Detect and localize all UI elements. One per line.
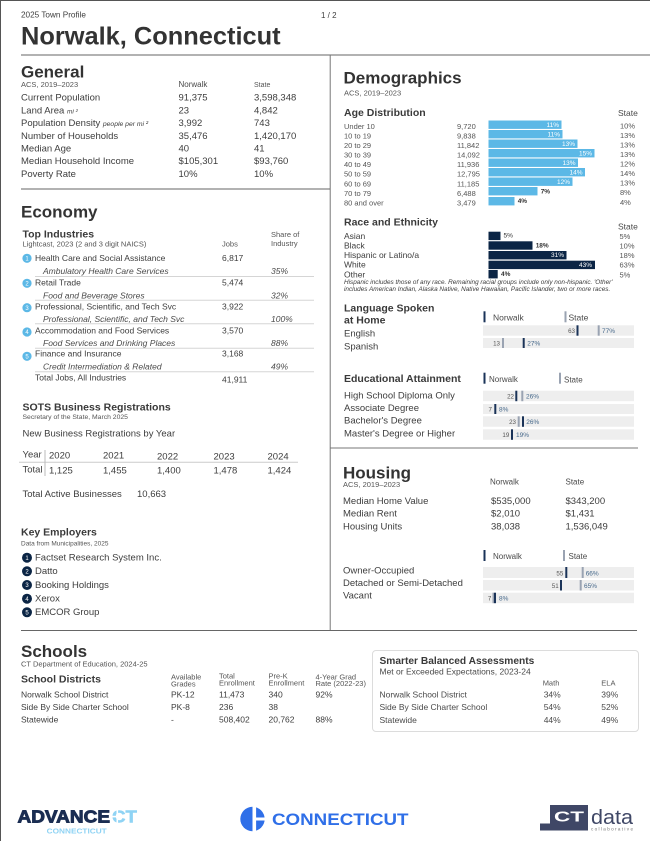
- education chart: 8%: [499, 406, 509, 414]
- page number: 1 / 2: [321, 11, 337, 20]
- education chart: 19%: [516, 432, 529, 439]
- housing column headers: [490, 478, 585, 487]
- housing table: Median Home Value: [343, 496, 428, 507]
- race state header: State: [618, 221, 638, 231]
- key employers list: EMCOR Group: [35, 607, 99, 618]
- top industries table: 100%: [271, 314, 293, 324]
- industries column headers: Share of: [271, 230, 300, 239]
- panel: general: [21, 63, 296, 180]
- registrations table: 1,400: [157, 466, 181, 477]
- logo: AdvanceCT: CT: [112, 807, 137, 827]
- school districts table: Statewide: [21, 715, 59, 725]
- language chart: 63: [568, 328, 576, 335]
- school districts heading: School Districts: [21, 673, 101, 685]
- education chart: 7: [489, 406, 493, 414]
- logo: Connecticut: CONNECTICUT: [272, 810, 409, 829]
- race and ethnicity chart: 18%: [536, 242, 549, 249]
- panel: schools: [21, 642, 366, 725]
- educational attainment heading: Educational Attainment: [344, 373, 461, 385]
- school table headers: Grades: [171, 679, 196, 688]
- age distribution chart: 11,842: [457, 141, 479, 150]
- language chart: [344, 325, 634, 352]
- language chart: 13: [493, 340, 501, 348]
- general statistics table: 10%: [254, 169, 274, 180]
- age distribution chart: 13%: [620, 150, 635, 159]
- assessments table: 54%: [544, 702, 561, 712]
- heading: housing: Housing: [343, 463, 411, 482]
- top industries table: 3,922: [222, 302, 244, 312]
- housing table: Housing Units: [343, 521, 402, 532]
- school districts table: PK-12: [171, 689, 195, 699]
- school table headers: Pre-K: [268, 672, 288, 680]
- panel: economy: [19, 203, 314, 618]
- logo: AdvanceCT: [18, 807, 137, 835]
- top industries table: 5,474: [222, 278, 244, 288]
- top industries table: 49%: [271, 361, 288, 371]
- school districts table: [21, 689, 333, 725]
- general statistics table: 23: [178, 105, 189, 116]
- school districts table: 38: [268, 702, 278, 712]
- panel: demographics: [344, 68, 638, 440]
- housing table: $2,010: [491, 509, 520, 520]
- age distribution chart: 14%: [620, 169, 635, 178]
- school table headers: 4-Year Grad: [316, 672, 356, 682]
- column headers: State: [254, 82, 270, 89]
- logo: CT Data Collaborative: [540, 805, 634, 832]
- age distribution chart: 15%: [579, 150, 592, 158]
- housing chart: Detached or Semi-Detached: [343, 578, 463, 589]
- top industries table: Credit Intermediation & Related: [43, 361, 162, 371]
- education chart: 23: [509, 419, 517, 426]
- race and ethnicity chart: Black: [344, 240, 366, 250]
- age distribution chart: 4%: [620, 198, 631, 207]
- key employers list: [22, 552, 162, 618]
- registrations table: 2021: [103, 450, 124, 462]
- age distribution chart: 12%: [620, 160, 635, 169]
- registrations table: 1,125: [49, 466, 73, 477]
- age distribution chart: 11,936: [457, 160, 479, 169]
- top industries table: 5: [25, 354, 29, 360]
- housing table: 1,536,049: [566, 521, 608, 532]
- total active businesses: Total Active Businesses: [22, 489, 122, 500]
- industries column headers: [222, 230, 300, 249]
- housing table: Median Rent: [343, 509, 397, 520]
- race footnote: includes American Indian, Alaska Native, Native Hawaiian, Pacific Islander, two or more races.: [344, 286, 610, 293]
- general statistics table: Number of Households: [21, 131, 118, 142]
- age distribution chart: 3,479: [457, 199, 476, 208]
- race and ethnicity chart: White: [344, 260, 366, 270]
- registrations subtitle: New Business Registrations by Year: [22, 428, 175, 439]
- education legend: [484, 373, 583, 384]
- source note: ACS, 2019–2023: [21, 80, 78, 89]
- top industries table: Professional, Scientific, and Tech Svc: [43, 314, 185, 324]
- race footnote: [344, 279, 613, 293]
- general statistics table: Current Population: [21, 93, 100, 104]
- top industries table: 6,817: [222, 253, 244, 263]
- key employers list: Datto: [35, 566, 58, 577]
- general statistics table: Population Density people per mi ²: [21, 118, 149, 129]
- age distribution chart: 13%: [620, 131, 635, 140]
- top industries table: Ambulatory Health Care Services: [42, 266, 169, 276]
- assessments table: 39%: [601, 689, 619, 699]
- education chart: 22: [507, 394, 515, 400]
- schools source: CT Department of Education, 2024-25: [21, 659, 148, 668]
- key employers list: 5: [25, 610, 29, 616]
- registrations table: 2022: [157, 452, 178, 462]
- panel: smarter balanced assessments: [372, 650, 638, 732]
- general statistics table: Poverty Rate: [21, 169, 76, 180]
- general statistics table: 41: [254, 144, 265, 154]
- age distribution chart: 9,838: [457, 132, 476, 140]
- top industries table: 88%: [271, 338, 288, 348]
- school districts table: 508,402: [219, 715, 250, 725]
- race and ethnicity chart: 10%: [620, 241, 635, 250]
- heading: general: General: [21, 63, 84, 82]
- age distribution chart: 9,720: [457, 122, 476, 131]
- language legend: Norwalk: [493, 313, 524, 323]
- age distribution chart: 8%: [620, 188, 631, 197]
- language heading: [344, 303, 434, 326]
- school table headers: Enrollment: [268, 678, 305, 688]
- housing chart: 55: [556, 570, 564, 578]
- school table headers: Total: [219, 672, 235, 680]
- industries column headers: Industry: [271, 239, 298, 248]
- language chart: English: [344, 329, 375, 340]
- registrations table: 1,455: [103, 466, 127, 477]
- industries column headers: Jobs: [222, 240, 238, 249]
- key employers list: 3: [25, 583, 29, 589]
- general statistics table: [21, 93, 296, 180]
- age state header: State: [618, 108, 638, 118]
- general statistics table: 91,375: [178, 93, 208, 104]
- school districts table: PK-8: [171, 702, 190, 712]
- school table headers: Rate (2022-23): [316, 679, 366, 688]
- race and ethnicity chart: [344, 231, 635, 279]
- top industries table: Health Care and Social Assistance: [35, 253, 166, 263]
- language chart: Spanish: [344, 341, 378, 352]
- assessments table: Side By Side Charter School: [380, 702, 487, 712]
- age distribution chart: Under 10: [344, 122, 375, 131]
- registrations table: 1,424: [268, 466, 291, 477]
- age distribution chart: 7%: [541, 188, 550, 195]
- race and ethnicity chart: 31%: [551, 252, 564, 259]
- page header: [21, 10, 337, 50]
- registrations table: [19, 450, 298, 477]
- assessments table: Norwalk School District: [380, 689, 468, 699]
- language chart: 27%: [527, 340, 541, 348]
- column headers: [178, 80, 270, 89]
- general statistics table: 3,598,348: [254, 93, 296, 104]
- registrations table: 2024: [268, 452, 289, 462]
- education legend: Norwalk: [489, 375, 519, 384]
- age distribution chart: 13%: [620, 140, 635, 149]
- registrations table: Total: [22, 464, 43, 475]
- race and ethnicity chart: 5%: [620, 232, 631, 241]
- assessments table: 34%: [544, 689, 561, 699]
- key employers list: Factset Research System Inc.: [35, 552, 162, 563]
- SOTS source: Secretary of the State, March 2025: [22, 414, 128, 421]
- key employers list: 2: [25, 569, 29, 575]
- general statistics table: $105,301: [178, 156, 218, 167]
- top industries table: 41,911: [222, 374, 248, 384]
- logo: AdvanceCT: CONNECTICUT: [47, 826, 107, 835]
- key employers heading: Key Employers: [21, 527, 97, 539]
- general statistics table: $93,760: [254, 156, 288, 167]
- race and ethnicity chart: Asian: [344, 231, 366, 241]
- top industries table: Food and Beverage Stores: [43, 290, 145, 300]
- top industries table: Finance and Insurance: [35, 349, 122, 359]
- key employers list: Booking Holdings: [35, 580, 109, 591]
- registrations table: Year: [22, 450, 42, 461]
- age distribution heading: Age Distribution: [344, 107, 426, 119]
- age distribution chart: 14,092: [457, 151, 480, 160]
- general statistics table: 3,992: [178, 118, 202, 129]
- title: Norwalk, Connecticut: [21, 22, 281, 50]
- race and ethnicity chart: 5%: [620, 270, 631, 279]
- housing chart: Owner-Occupied: [343, 565, 414, 576]
- total active businesses: [22, 489, 166, 500]
- school table headers: Enrollment: [219, 678, 256, 688]
- race and ethnicity heading: Race and Ethnicity: [344, 216, 438, 228]
- school districts table: -: [171, 715, 174, 725]
- age distribution chart: 30 to 39: [344, 151, 371, 160]
- top industries table: 3,570: [222, 325, 244, 335]
- language heading: at Home: [344, 314, 386, 326]
- housing table: [343, 496, 608, 532]
- logo: CT Data Collaborative: data: [591, 807, 634, 829]
- school districts table: Side By Side Charter School: [21, 702, 129, 712]
- general statistics table: Median Age: [21, 144, 71, 154]
- age distribution chart: 10%: [620, 121, 635, 130]
- assessments table: Statewide: [380, 715, 417, 725]
- age distribution chart: 70 to 79: [344, 189, 371, 198]
- logo: CT Data Collaborative: collaborative: [591, 827, 633, 832]
- age distribution chart: 12,795: [457, 170, 480, 179]
- education chart: 19: [502, 432, 510, 439]
- language legend: [484, 311, 589, 323]
- age distribution chart: 20 to 29: [344, 141, 371, 150]
- heading: schools: Schools: [21, 642, 87, 661]
- race and ethnicity chart: 4%: [501, 271, 511, 278]
- top industries table: 35%: [271, 266, 288, 276]
- assessments table: Math: [543, 679, 559, 688]
- logo: CT Data Collaborative: CT: [554, 809, 584, 825]
- top industries source: Lightcast, 2023 (2 and 3 digit NAICS): [22, 240, 147, 249]
- general statistics table: Median Household Income: [21, 156, 134, 167]
- age distribution chart: 11%: [547, 132, 560, 138]
- housing table: $343,200: [566, 496, 605, 507]
- school districts table: 236: [219, 702, 233, 712]
- age distribution chart: 60 to 69: [344, 179, 371, 188]
- race and ethnicity chart: Other: [344, 269, 365, 279]
- SOTS heading: SOTS Business Registrations: [22, 402, 171, 414]
- assessments table: ELA: [601, 679, 615, 688]
- race and ethnicity chart: 63%: [620, 261, 635, 270]
- top industries table: 32%: [271, 290, 288, 300]
- top industries heading: Top Industries: [22, 229, 94, 241]
- language chart: 77%: [602, 328, 615, 335]
- key employers list: Xerox: [35, 594, 60, 604]
- age distribution chart: 13%: [620, 178, 635, 187]
- top industries table: 1: [25, 256, 29, 262]
- panel: housing: [343, 463, 634, 603]
- assessments table: 49%: [601, 715, 619, 725]
- school districts table: 20,762: [268, 715, 295, 725]
- school districts table: 88%: [316, 715, 333, 725]
- school districts table: 92%: [316, 689, 333, 699]
- registrations table: 2023: [214, 452, 235, 462]
- top industries table: 2: [25, 281, 29, 287]
- assessments heading: Smarter Balanced Assessments: [380, 656, 535, 667]
- top industries table: Professional, Scientific, and Tech Svc: [35, 302, 177, 312]
- logo: Connecticut: [240, 806, 409, 832]
- housing chart: 51: [552, 583, 559, 590]
- education legend: State: [564, 376, 583, 384]
- general statistics table: 1,420,170: [254, 131, 296, 142]
- top industries table: 4: [25, 330, 29, 336]
- key employers list: 4: [25, 597, 29, 603]
- housing table: $535,000: [491, 496, 531, 507]
- registrations table: 2020: [49, 450, 70, 462]
- housing chart: 8%: [499, 596, 509, 602]
- school districts table: 11,473: [219, 689, 245, 699]
- race footnote: Hispanic includes those of any race. Remaining racial groups include only non-hispanic. 'Other': [344, 279, 613, 286]
- column headers: Norwalk: [178, 80, 208, 89]
- general statistics table: 40: [178, 144, 189, 154]
- school districts table: Norwalk School District: [21, 689, 109, 699]
- general statistics table: 10%: [178, 169, 198, 180]
- age distribution chart: 11%: [546, 122, 559, 129]
- general statistics table: 743: [254, 118, 270, 129]
- general statistics table: Land Area mi ²: [21, 105, 79, 116]
- language legend: State: [568, 313, 589, 323]
- age distribution chart: 13%: [562, 141, 575, 148]
- top industries table: Retail Trade: [35, 278, 81, 288]
- education chart: 26%: [526, 394, 539, 400]
- age distribution chart: 4%: [518, 198, 527, 205]
- education chart: [344, 390, 634, 440]
- age distribution chart: 10 to 19: [344, 132, 371, 140]
- logo: AdvanceCT: ADVANCE: [18, 807, 110, 827]
- housing table: 38,038: [491, 521, 520, 532]
- race and ethnicity chart: Hispanic or Latino/a: [344, 250, 419, 260]
- housing column headers: State: [566, 478, 585, 487]
- assessments table: 44%: [544, 715, 561, 725]
- housing chart: [343, 565, 634, 603]
- age distribution chart: [344, 120, 635, 208]
- language heading: Language Spoken: [344, 303, 434, 315]
- education chart: Associate Degree: [344, 403, 419, 414]
- age distribution chart: 80 and over: [344, 199, 384, 208]
- race and ethnicity chart: 18%: [620, 251, 635, 260]
- age distribution chart: 12%: [557, 179, 570, 186]
- top industries table: Food Services and Drinking Places: [43, 338, 176, 348]
- heading: demographics: Demographics: [344, 68, 462, 87]
- top industries table: Total Jobs, All Industries: [35, 373, 126, 383]
- housing legend: Norwalk: [493, 552, 523, 561]
- assessments subtitle: Met or Exceeded Expectations, 2023-24: [380, 667, 531, 677]
- report label: 2025 Town Profile: [21, 10, 86, 20]
- education chart: Bachelor's Degree: [344, 416, 422, 427]
- key employers list: 1: [25, 556, 29, 562]
- school districts table: 340: [268, 689, 283, 699]
- general statistics table: 35,476: [178, 131, 208, 142]
- housing table: $1,431: [566, 509, 595, 520]
- race and ethnicity chart: 43%: [579, 262, 592, 269]
- age distribution chart: 6,488: [457, 189, 476, 198]
- age distribution chart: 50 to 59: [344, 170, 371, 179]
- assessments table: [380, 679, 619, 725]
- housing chart: Vacant: [343, 591, 372, 602]
- demographics source: ACS, 2019–2023: [344, 89, 401, 98]
- race and ethnicity chart: 5%: [504, 233, 513, 240]
- general statistics table: 4,842: [254, 105, 278, 116]
- housing legend: State: [568, 552, 588, 561]
- school table headers: Available: [171, 672, 201, 682]
- top industries table: Accommodation and Food Services: [35, 325, 169, 335]
- education chart: Master's Degree or Higher: [344, 428, 455, 439]
- housing source: ACS, 2019–2023: [343, 480, 400, 489]
- assessments table: 52%: [601, 702, 619, 712]
- age distribution chart: 13%: [562, 160, 576, 167]
- top industries table: [22, 253, 314, 384]
- education chart: 26%: [526, 419, 540, 426]
- heading: economy: Economy: [21, 203, 98, 222]
- housing legend: [484, 550, 588, 561]
- total active businesses: 10,663: [137, 489, 166, 500]
- housing column headers: Norwalk: [490, 478, 520, 487]
- education chart: High School Diploma Only: [344, 390, 455, 401]
- registrations table: 1,478: [214, 466, 237, 477]
- top industries table: 3,168: [222, 349, 244, 359]
- school table headers: [171, 672, 366, 688]
- key employers source: Data from Municipalities, 2025: [21, 540, 109, 547]
- top industries table: 3: [25, 306, 29, 312]
- housing chart: 65%: [584, 583, 597, 590]
- housing chart: 66%: [586, 570, 599, 578]
- age distribution chart: 11,185: [457, 179, 479, 188]
- age distribution chart: 14%: [569, 170, 583, 176]
- age distribution chart: 40 to 49: [344, 160, 371, 169]
- housing chart: 7: [488, 596, 492, 602]
